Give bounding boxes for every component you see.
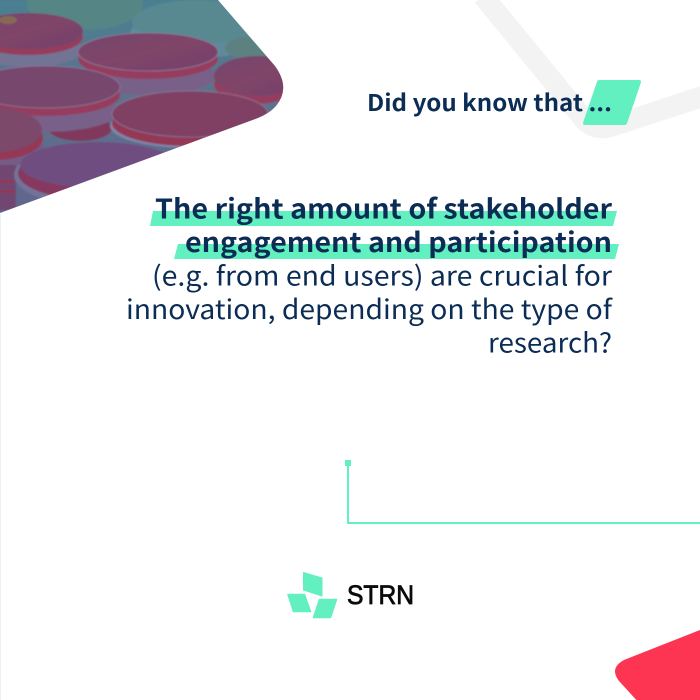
main statement text xyxy=(126,188,613,360)
main statement text: engagement and participation xyxy=(185,221,612,260)
logo: STRN xyxy=(288,572,414,618)
heading: did you know that: Did you know that ... xyxy=(367,84,612,118)
highlight: line two xyxy=(174,244,619,259)
green accent parallelogram xyxy=(585,82,639,123)
main statement text: innovation, depending on the type of xyxy=(126,288,613,327)
main statement text: (e.g. from end users) are crucial for xyxy=(152,254,613,294)
left edge line xyxy=(0,214,1,700)
main statement text: The right amount of stakeholder xyxy=(155,188,612,226)
photo: petri dishes xyxy=(0,0,302,220)
connector line xyxy=(345,460,700,523)
highlight: line one xyxy=(150,211,617,226)
main statement text: research? xyxy=(488,322,612,360)
red corner shape xyxy=(615,630,700,700)
grey background band xyxy=(483,0,700,128)
logo: STRN: STRN xyxy=(347,580,414,610)
